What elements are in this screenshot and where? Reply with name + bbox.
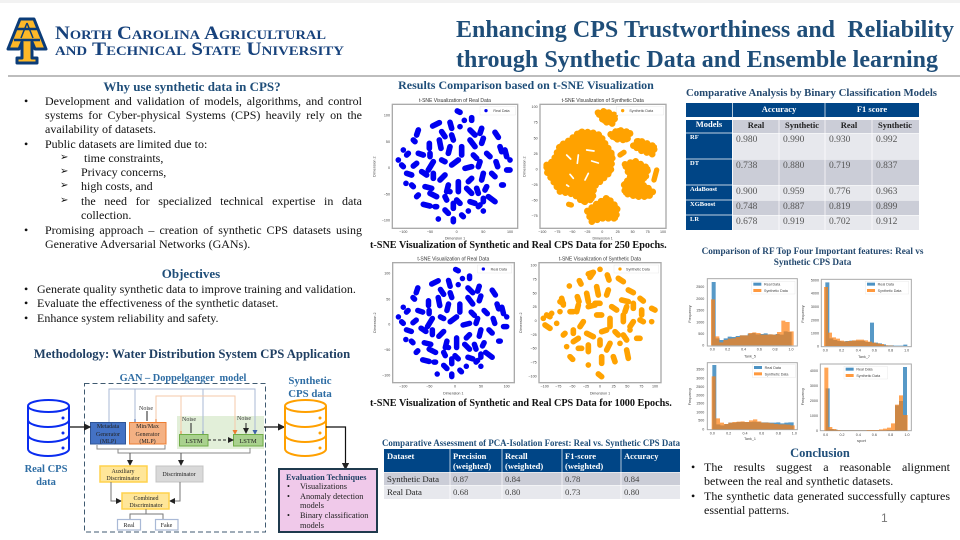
- text block: objectives list: [24, 282, 356, 325]
- chart: real data 250 epochs: 50: [481, 230, 485, 234]
- table body: 0.719: [829, 161, 851, 171]
- chart: synthetic data 250 epochs: −25: [584, 230, 590, 234]
- GAN doppelganger diagram: (MLP): [139, 438, 156, 445]
- chart: sport histogram: 3000: [810, 384, 818, 388]
- table body: F1 score: [857, 104, 887, 114]
- panel: evaluation techniques: Evaluation Techniques: [286, 473, 367, 482]
- chart: synthetic data 250 epochs: 75: [646, 230, 650, 234]
- chart: Tank_7 histogram: 1000: [811, 332, 819, 336]
- chart: synthetic data 250 epochs: 25: [616, 230, 620, 234]
- page number: 1: [881, 511, 888, 525]
- chart: Tank_1 histogram: 0: [702, 428, 704, 432]
- text block: bullets: [24, 94, 362, 251]
- chart: synthetic data 1000 epochs: −25: [583, 384, 589, 388]
- chart: synthetic data 1000 epochs: 50: [533, 291, 537, 295]
- heading: why use synthetic data: Why use synthetic data in CPS?: [103, 79, 281, 94]
- chart: Tank_1 histogram: [688, 363, 797, 441]
- text block: bullets: collection.: [81, 208, 131, 222]
- table body: 0.930: [829, 135, 851, 145]
- chart: synthetic data 250 epochs: 50: [534, 136, 538, 140]
- chart: synthetic data 1000 epochs: Synthetic Data: [626, 267, 651, 271]
- table body: 0.899: [876, 202, 898, 212]
- text block: conclusion bullets: [691, 460, 950, 517]
- chart: real data 1000 epochs: t-SNE Visualization of Real Data: [417, 256, 489, 262]
- chart: synthetic data 250 epochs: Synthetic Data: [629, 109, 654, 113]
- chart: synthetic data 1000 epochs: 100: [652, 384, 658, 388]
- chart: real data 1000 epochs: −50: [384, 348, 390, 352]
- panel: evaluation techniques: •: [287, 511, 290, 520]
- heading: objectives: Objectives: [162, 266, 220, 281]
- panel: evaluation techniques: •: [287, 482, 290, 491]
- chart: synthetic data 1000 epochs: Dimension 2: [519, 313, 523, 333]
- chart: synthetic data 1000 epochs: 0: [599, 384, 601, 388]
- chart: Tank_7 histogram: 2000: [811, 318, 819, 322]
- heading: top four features: Synthetic CPS Data: [774, 257, 851, 267]
- chart: Tank_5 histogram: 1000: [696, 320, 704, 324]
- panel: objectives: [24, 266, 356, 325]
- chart: real data 250 epochs: t-SNE Visualization of Real Data: [419, 98, 491, 104]
- table body: Real: [841, 120, 858, 130]
- caption: 1000 epochs: t-SNE Visualization of Synthetic and Real CPS Data for 1000 Epochs.: [370, 398, 672, 409]
- chart: synthetic data 1000 epochs: −50: [569, 384, 575, 388]
- arrow: real data to GAN: [70, 426, 90, 428]
- table body: 0.776: [829, 187, 851, 197]
- table body: Recall: [505, 451, 528, 461]
- chart: synthetic data 250 epochs: Dimension 2: [522, 157, 526, 177]
- chart: synthetic data 250 epochs: −100: [538, 230, 546, 234]
- chart: synthetic data 1000 epochs: Dimension 1: [590, 391, 610, 395]
- table body: [686, 103, 919, 230]
- chart: synthetic data 250 epochs: 100: [660, 230, 666, 234]
- chart: Tank_1 histogram: 500: [698, 419, 704, 423]
- icon: real CPS database: [28, 400, 69, 456]
- GAN doppelganger diagram: LSTM: [239, 438, 257, 445]
- heading: methodology: Methodology: Water Distribution System CPS Application: [34, 347, 350, 361]
- chart: Tank_7 histogram: 0.4: [856, 348, 861, 352]
- chart: synthetic data 1000 epochs: −100: [541, 384, 549, 388]
- table body: 0.900: [736, 187, 758, 197]
- chart: synthetic data 1000 epochs: 25: [533, 305, 537, 309]
- table body: 0.887: [783, 202, 805, 212]
- chart: Tank_7 histogram: Real Data: [878, 283, 895, 287]
- text block: bullets: systems for Cyber-physical Systems (CPS) heavily rely on the: [45, 108, 362, 122]
- heading: binary classification table: Comparative Analysis by Binary Classification Models: [686, 87, 938, 99]
- title: [456, 17, 954, 73]
- chart: synthetic data 250 epochs: [522, 98, 666, 241]
- chart: sport histogram: 0.4: [856, 433, 861, 437]
- heading: top four features: [702, 246, 924, 267]
- GAN doppelganger diagram: LSTM: [185, 438, 203, 445]
- chart: sport histogram: 1000: [810, 414, 818, 418]
- text block: bullets: Promising approach – creation of synthetic CPS datasets using: [45, 223, 362, 237]
- table body: Real Data: [387, 487, 422, 497]
- text block: bullets: ➢: [60, 180, 68, 191]
- chart: Tank_5 histogram: Synthetic Data: [764, 289, 789, 293]
- text block: bullets: the need for specialized technical expertise in data: [81, 194, 362, 208]
- text block: bullets: ➢: [60, 152, 68, 163]
- table body: XGBoost: [690, 201, 716, 208]
- table body: 0.880: [783, 161, 805, 171]
- GAN doppelganger diagram: GAN – Doppelganger model: [120, 373, 247, 384]
- chart: Tank_7 histogram: 0: [817, 344, 819, 348]
- chart: Tank_5 histogram: 0.8: [772, 348, 778, 352]
- chart: Tank_7 histogram: 4000: [811, 292, 819, 296]
- heading: conclusion: Conclusion: [790, 446, 850, 460]
- table body: Accuracy: [762, 104, 797, 114]
- icon: A&T shield: [8, 19, 46, 63]
- chart: synthetic data 1000 epochs: −100: [528, 375, 537, 379]
- GAN doppelganger diagram: Combined: [134, 496, 158, 502]
- chart: real data 250 epochs: 0: [456, 230, 458, 234]
- chart: real data 250 epochs: Dimension 2: [372, 157, 376, 177]
- chart: sport histogram: Synthetic Data: [856, 374, 881, 378]
- table body: Dataset: [387, 451, 415, 461]
- chart: Tank_5 histogram: Real Data: [764, 283, 781, 287]
- GAN doppelganger diagram: Noise: [139, 406, 153, 412]
- GAN doppelganger diagram: Noise: [237, 416, 251, 422]
- chart: Tank_7 histogram: 0.6: [872, 348, 877, 352]
- chart: Tank_5 histogram: 2500: [696, 285, 704, 289]
- chart: Tank_1 histogram: 0.8: [776, 432, 781, 436]
- text block: objectives list: Evaluate the effectiveness of the synthetic dataset.: [37, 296, 278, 310]
- label: synthetic CPS data: Synthetic: [288, 375, 332, 387]
- text block: objectives list: •: [24, 282, 28, 296]
- chart: real data 1000 epochs: 0: [388, 323, 390, 327]
- table body: 0.912: [876, 217, 898, 227]
- chart: Tank_5 histogram: Frequency: [688, 305, 692, 323]
- text block: objectives list: •: [24, 311, 28, 325]
- chart: Tank_1 histogram: 2000: [696, 394, 704, 398]
- methodology diagram: [24, 373, 378, 533]
- chart: real data 250 epochs: 0: [388, 166, 390, 170]
- table body: 0.68: [453, 487, 469, 497]
- label: real CPS data: data: [36, 477, 57, 488]
- chart: Tank_1 histogram: 0.0: [710, 432, 715, 436]
- label: real CPS data: Real CPS: [25, 464, 68, 475]
- GAN doppelganger diagram: Generator: [96, 432, 120, 438]
- table body: 0.80: [505, 487, 521, 497]
- text block: objectives list: Enhance system reliability and safety.: [37, 311, 218, 325]
- chart: synthetic data 1000 epochs: 50: [625, 384, 629, 388]
- GAN doppelganger diagram: Min/Max: [136, 424, 159, 430]
- table body: LR: [690, 216, 699, 223]
- table body: (weighted): [453, 461, 491, 471]
- table body: 0.702: [829, 217, 851, 227]
- chart: sport histogram: Real Data: [856, 368, 874, 372]
- chart: synthetic data 1000 epochs: −50: [530, 347, 537, 351]
- chart: Tank_1 histogram: 1.0: [792, 432, 797, 436]
- chart: Tank_7 histogram: Frequency: [801, 305, 805, 323]
- chart: real data 250 epochs: −100: [382, 218, 390, 222]
- chart: sport histogram: 0.8: [888, 433, 893, 437]
- table: binary classification: [686, 87, 938, 230]
- chart: synthetic data 1000 epochs: −75: [530, 361, 537, 365]
- caption: 250 epochs: t-SNE Visualization of Synthetic and Real CPS Data for 250 Epochs.: [370, 240, 667, 251]
- chart: real data 250 epochs: 100: [384, 113, 390, 117]
- panel: evaluation techniques: Visualizations: [300, 482, 347, 491]
- table body: Precision: [453, 451, 487, 461]
- text block: bullets: high costs, and: [81, 179, 153, 193]
- text block: conclusion bullets: The synthetic data generated successfully captures: [704, 489, 950, 503]
- chart: Tank_7 histogram: 0.8: [888, 348, 893, 352]
- table body: 0.84: [505, 474, 521, 484]
- chart: synthetic data 1000 epochs: 25: [612, 384, 616, 388]
- text block: bullets: ➢: [60, 195, 68, 206]
- chart: real data 1000 epochs: 100: [504, 384, 510, 388]
- chart: real data 250 epochs: −50: [384, 192, 390, 196]
- GAN doppelganger diagram: Metadata: [97, 424, 119, 430]
- table body: 0.819: [829, 202, 851, 212]
- table body: F1-score: [565, 451, 596, 461]
- chart: synthetic data 1000 epochs: 75: [533, 277, 537, 281]
- table body: 0.963: [876, 187, 898, 197]
- arrow: synthetic data to evaluation: [326, 427, 346, 469]
- chart: synthetic data 250 epochs: −25: [531, 183, 538, 187]
- chart: real data 250 epochs: −100: [399, 230, 407, 234]
- chart: Tank_5 histogram: 1500: [696, 309, 704, 313]
- chart: sport histogram: 0.2: [839, 433, 845, 437]
- GAN doppelganger diagram: Real: [124, 523, 135, 529]
- chart: real data 1000 epochs: Dimension 1: [443, 391, 463, 395]
- chart: Tank_5 histogram: Tank_5: [744, 354, 756, 358]
- icon: synthetic CPS database: [285, 400, 326, 456]
- table body: 0.87: [453, 474, 469, 484]
- GAN doppelganger diagram: Generator: [136, 432, 160, 438]
- text block: bullets: Development and validation of models, algorithms, and control: [45, 94, 362, 108]
- panel: evaluation techniques: Binary classification: [300, 511, 369, 520]
- panel: evaluation techniques: Anomaly detection: [300, 492, 364, 501]
- chart: Tank_7 histogram: 0.0: [823, 348, 828, 352]
- university name: [55, 24, 345, 60]
- title: Enhancing CPS Trustworthiness and Reliability: [456, 17, 954, 43]
- table body: 0.84: [624, 474, 640, 484]
- chart: sport histogram: 0.6: [872, 433, 877, 437]
- text block: bullets: time constraints,: [84, 151, 163, 165]
- panel: evaluation techniques: [279, 469, 377, 532]
- panel: evaluation techniques: •: [287, 492, 290, 501]
- chart: Tank_7 histogram: 5000: [811, 278, 819, 282]
- chart: sport histogram: Frequency: [801, 388, 805, 405]
- text block: bullets: •: [24, 223, 28, 237]
- chart: Tank_1 histogram: Synthetic Data: [765, 372, 789, 376]
- panel: evaluation techniques: models: [300, 521, 324, 530]
- label: synthetic CPS data: CPS data: [288, 388, 332, 400]
- table body: 0.990: [783, 135, 805, 145]
- chart: sport histogram: 4000: [810, 369, 818, 373]
- chart: real data 250 epochs: Dimension 1: [445, 237, 465, 241]
- table body: AdaBoost: [690, 186, 718, 193]
- chart: real data 250 epochs: [372, 98, 518, 241]
- panel: evaluation techniques: models: [300, 501, 324, 510]
- chart: Tank_1 histogram: 1000: [696, 410, 704, 414]
- table body: 0.992: [876, 135, 898, 145]
- text block: objectives list: Generate quality synthetic data to improve training and validation.: [37, 282, 356, 296]
- chart: synthetic data 1000 epochs: t-SNE Visualization of Synthetic Data: [559, 256, 641, 262]
- chart: Tank_5 histogram: [688, 279, 797, 358]
- chart: real data 250 epochs: Real Data: [493, 109, 511, 113]
- chart: Tank_7 histogram: 0.2: [839, 348, 844, 352]
- chart: synthetic data 250 epochs: −75: [531, 214, 538, 218]
- university name: and Technical State University: [55, 40, 345, 60]
- chart: Tank_1 histogram: 2500: [696, 385, 704, 389]
- text block: bullets: •: [24, 137, 28, 151]
- table body: 0.919: [783, 217, 805, 227]
- text block: bullets: availability of datasets.: [45, 122, 156, 136]
- panel: conclusion: [691, 446, 950, 517]
- chart: real data 1000 epochs: Dimension 2: [373, 313, 377, 333]
- table: PCA isolation forest: [382, 439, 680, 499]
- chart: Tank_1 histogram: 3000: [696, 376, 704, 380]
- chart: synthetic data 250 epochs: 0: [536, 167, 538, 171]
- chart: real data 1000 epochs: −100: [399, 384, 407, 388]
- chart: sport histogram: [801, 364, 911, 437]
- chart: Tank_1 histogram: 0.4: [742, 432, 748, 436]
- chart: real data 1000 epochs: 50: [479, 384, 483, 388]
- chart: real data 1000 epochs: [373, 256, 514, 395]
- chart: sport histogram: 1.0: [904, 433, 910, 437]
- table body: DT: [690, 160, 700, 167]
- table body: 0.73: [565, 487, 581, 497]
- text block: bullets: ➢: [60, 166, 68, 177]
- chart: synthetic data 1000 epochs: −75: [555, 384, 561, 388]
- chart: Tank_1 histogram: 0.2: [726, 432, 731, 436]
- chart: synthetic data 1000 epochs: 0: [535, 319, 537, 323]
- chart: Tank_1 histogram: 1500: [696, 402, 704, 406]
- chart: Tank_1 histogram: 0.6: [759, 432, 764, 436]
- table body: Synthetic: [878, 120, 912, 130]
- table body: RF: [690, 134, 699, 141]
- chart: synthetic data 250 epochs: 75: [534, 121, 538, 125]
- arrow: GAN to synthetic data: [264, 426, 284, 428]
- table body: 0.738: [736, 161, 758, 171]
- chart: Tank_7 histogram: Synthetic Data: [878, 289, 902, 293]
- chart: synthetic data 250 epochs: t-SNE Visualization of Synthetic Data: [562, 98, 644, 104]
- chart: Tank_5 histogram: 0.4: [741, 348, 746, 352]
- chart: Tank_5 histogram: 0.6: [757, 348, 762, 352]
- text block: conclusion bullets: essential patterns.: [704, 503, 789, 517]
- chart: Tank_1 histogram: Real Data: [765, 366, 782, 370]
- chart: synthetic data 250 epochs: −50: [531, 198, 538, 202]
- GAN doppelganger diagram: Auxiliary: [112, 469, 134, 475]
- GAN doppelganger diagram: Discriminator: [162, 472, 196, 478]
- table body: 0.959: [783, 187, 805, 197]
- chart: Tank_1 histogram: 3500: [696, 368, 704, 372]
- chart: real data 250 epochs: 100: [507, 230, 513, 234]
- GAN doppelganger diagram: Noise: [182, 417, 196, 423]
- table body: 0.78: [565, 474, 581, 484]
- chart: Tank_5 histogram: 0.0: [710, 348, 715, 352]
- table body: [384, 449, 680, 499]
- panel: why use synthetic data: [24, 79, 362, 251]
- chart: real data 1000 epochs: −50: [426, 384, 432, 388]
- text block: bullets: •: [24, 94, 28, 108]
- chart: Tank_1 histogram: Tank_1: [744, 437, 756, 441]
- heading: results comparison: Results Comparison based on t-SNE Visualization: [398, 78, 654, 92]
- university name: North Carolina Agricultural: [55, 24, 326, 44]
- chart: synthetic data 250 epochs: −50: [569, 230, 575, 234]
- label: synthetic CPS data: [288, 375, 332, 400]
- chart: synthetic data 1000 epochs: 100: [531, 263, 537, 267]
- chart: sport histogram: 0: [816, 429, 818, 433]
- text block: bullets: Public datasets are limited due to:: [45, 137, 207, 151]
- chart: sport histogram: 0.0: [823, 433, 828, 437]
- chart: synthetic data 250 epochs: 100: [532, 105, 538, 109]
- chart: synthetic data 1000 epochs: [519, 256, 661, 395]
- text block: conclusion bullets: •: [691, 460, 695, 474]
- label: real CPS data: [25, 464, 68, 488]
- chart: sport histogram: 2000: [810, 399, 818, 403]
- chart: synthetic data 250 epochs: 50: [631, 230, 635, 234]
- title: through Synthetic Data and Ensemble learning: [456, 47, 938, 73]
- chart: real data 1000 epochs: −100: [382, 373, 390, 377]
- text block: objectives list: •: [24, 296, 28, 310]
- text block: conclusion bullets: between the real and synthetic datasets.: [704, 474, 893, 488]
- text block: bullets: Privacy concerns,: [81, 165, 166, 179]
- chart: Tank_7 histogram: 1.0: [904, 348, 909, 352]
- table body: Accuracy: [624, 451, 659, 461]
- GAN doppelganger diagram: Fake: [161, 523, 173, 529]
- table body: 0.837: [876, 161, 898, 171]
- heading: PCA table: Comparative Assessment of PCA-Isolation Forest: Real vs. Synthetic CPS Data: [382, 439, 680, 449]
- text block: conclusion bullets: The results suggest a reasonable alignment: [704, 460, 950, 474]
- chart: Tank_5 histogram: 1.0: [788, 348, 794, 352]
- table body: Real: [748, 120, 765, 130]
- table body: (weighted): [565, 461, 603, 471]
- label: sport axis: sport: [857, 438, 866, 443]
- table body: Synthetic: [785, 120, 819, 130]
- chart: real data 1000 epochs: 0: [454, 384, 456, 388]
- t-SNE charts: [372, 98, 667, 395]
- chart: Tank_5 histogram: 2000: [696, 297, 704, 301]
- chart: real data 250 epochs: −50: [427, 230, 433, 234]
- chart: synthetic data 250 epochs: 0: [601, 230, 603, 234]
- chart: Tank_7 histogram: 3000: [811, 305, 819, 309]
- chart: Tank_5 histogram: 0: [702, 344, 704, 348]
- chart: synthetic data 250 epochs: Dimension 1: [593, 237, 613, 241]
- text block: conclusion bullets: •: [691, 489, 695, 503]
- GAN doppelganger diagram: (MLP): [100, 438, 116, 445]
- chart: real data 1000 epochs: 50: [386, 297, 390, 301]
- chart: Tank_7 histogram: Tank_7: [858, 355, 870, 359]
- table body: (weighted): [505, 461, 543, 471]
- GAN doppelganger diagram: Discriminator: [129, 503, 163, 509]
- chart: synthetic data 1000 epochs: 75: [639, 384, 643, 388]
- table body: Models: [696, 119, 723, 129]
- chart: real data 1000 epochs: 100: [384, 272, 390, 276]
- text block: bullets: Generative Adversarial Networks (GANs).: [45, 237, 250, 251]
- chart: Tank_7 histogram: [801, 278, 911, 359]
- chart: real data 1000 epochs: Real Data: [491, 267, 508, 271]
- chart: Tank_5 histogram: 500: [698, 332, 704, 336]
- chart: real data 250 epochs: 50: [386, 140, 390, 144]
- chart: synthetic data 1000 epochs: −25: [530, 333, 537, 337]
- heading: top four features: Comparison of RF Top Four Important features: Real vs: [702, 246, 923, 256]
- university logo: [6, 18, 345, 64]
- table body: 0.980: [736, 135, 758, 145]
- chart: synthetic data 250 epochs: −75: [554, 230, 560, 234]
- histograms: [688, 278, 912, 441]
- table body: 0.80: [624, 487, 640, 497]
- table body: 0.748: [736, 202, 758, 212]
- chart: synthetic data 250 epochs: 25: [534, 152, 538, 156]
- table body: 0.678: [736, 217, 758, 227]
- GAN doppelganger diagram: Discriminator: [106, 476, 140, 482]
- table body: Synthetic Data: [387, 474, 439, 484]
- chart: Tank_5 histogram: 0.2: [725, 348, 730, 352]
- chart: Tank_1 histogram: Frequency: [688, 388, 692, 405]
- GAN doppelganger diagram: [84, 373, 266, 532]
